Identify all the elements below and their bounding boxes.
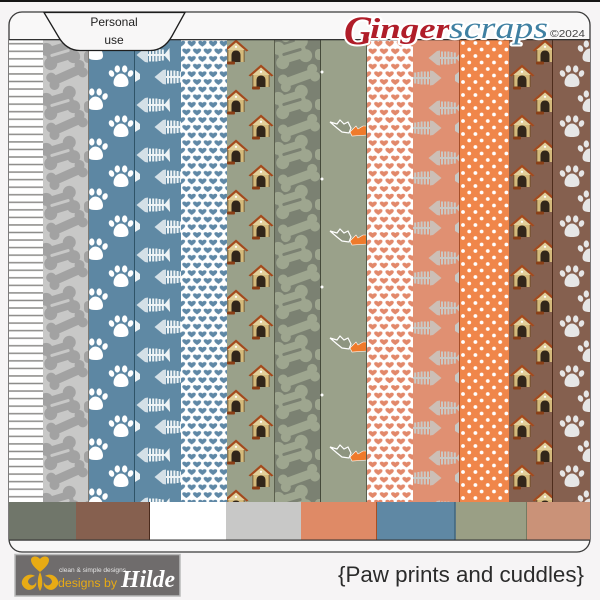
swatch row [9,502,590,540]
icon: gold ornament [22,556,58,591]
tagline: clean & simple designs [59,567,127,574]
logo: GingerScraps: scraps [449,10,548,45]
paper: grey bones [43,40,89,502]
title: {Paw prints and cuddles} [338,562,584,587]
logo: GingerScraps: G [344,8,373,53]
paper: blue fish bones [135,40,181,502]
logo: designs by Hilde [15,554,180,596]
paper: blue paws [89,40,135,502]
top edge bar [0,0,600,2]
paper: salmon fish bones [413,40,460,502]
designs by: designs by [58,578,117,590]
logo: GingerScraps [344,8,585,53]
tab: personal use [44,12,185,50]
paper: blue hearts [181,40,227,502]
copyright: ©2024 [550,28,585,40]
paper: sage dog houses [227,40,275,502]
paper: camouflage bones [275,40,321,502]
paper: grey stripes [9,40,43,502]
paper: brown dog houses [509,40,553,502]
tab label: Personal [90,15,138,29]
tab: personal use: use [104,33,124,47]
paper: brown paws [553,40,590,502]
Hilde signature: Hilde [120,567,175,593]
paper: orange dots [460,40,509,502]
paper: sage with sprigs [320,40,367,502]
logo: GingerScraps: inger [370,13,451,45]
paper: orange hearts [367,40,413,502]
